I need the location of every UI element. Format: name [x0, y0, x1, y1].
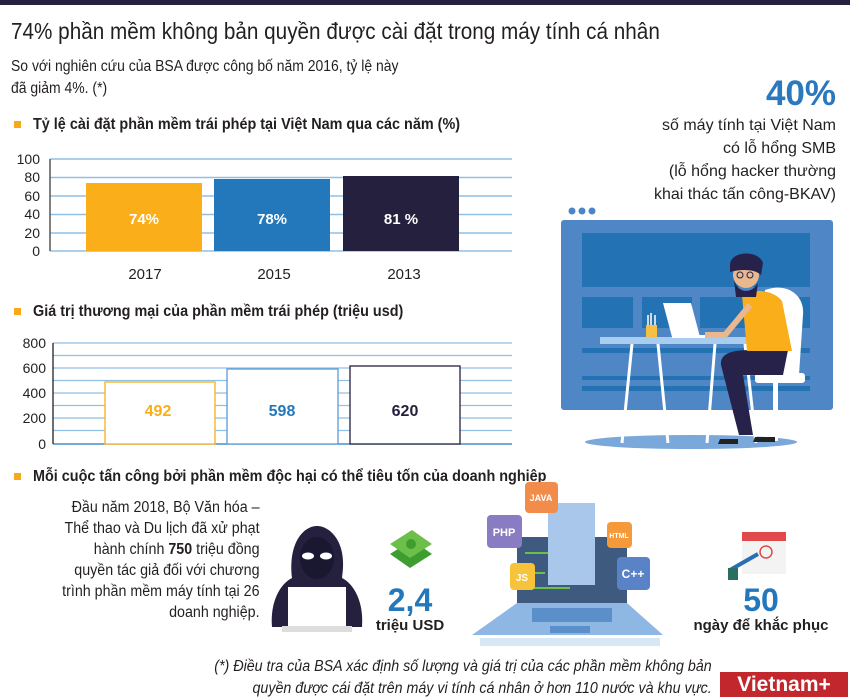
callout: 40% SMB: (lỗ hổng hacker thường	[669, 163, 836, 180]
bar chart: install rate: 100	[17, 151, 40, 167]
bar chart: commercial value	[22, 335, 512, 452]
heading: chart 2: Giá trị thương mại của phần mềm trái phép (triệu usd)	[33, 303, 403, 320]
callout: 40% SMB: số máy tính tại Việt Nam	[662, 117, 836, 134]
bar chart: install rate: 60	[24, 188, 40, 204]
bar chart: install rate: 74%	[129, 211, 159, 228]
logo: Vietnam+	[720, 672, 848, 697]
illustration: laptop with languages: JS	[516, 573, 528, 584]
bar chart: install rate: 20	[24, 225, 40, 241]
icon: money	[390, 530, 432, 568]
text block: fine: quyền tác giả đối với chương	[75, 562, 260, 579]
stat: 2,4 million USD: triệu USD	[376, 617, 444, 634]
bar chart: commercial value: 0	[38, 436, 46, 452]
text block: fine: hành chính 750 triệu đồng	[94, 541, 260, 558]
stat: 2,4 million USD	[376, 582, 444, 634]
stat: 2,4 million USD: 2,4	[388, 582, 432, 618]
callout: 40% SMB: 40%	[766, 74, 836, 113]
logo: Vietnam+: Vietnam+	[737, 673, 831, 696]
bar chart: commercial value: 492	[145, 403, 171, 420]
icon: hacker	[272, 526, 362, 632]
chair	[759, 288, 803, 375]
bar chart: install rate: 81 %	[384, 211, 418, 228]
top bar	[0, 0, 850, 5]
shirt	[742, 291, 792, 351]
head	[733, 262, 759, 288]
bar chart: install rate: 2017	[128, 266, 162, 283]
bar chart: commercial value: 200	[23, 410, 46, 426]
bar chart: install rate	[17, 151, 512, 283]
callout: 40% SMB: có lỗ hổng SMB	[723, 140, 836, 157]
bar chart: commercial value: 800	[23, 335, 46, 351]
bar chart: install rate: 80	[24, 169, 40, 185]
footnote: quyền được cái đặt trên máy vi tính cá nhân ở hơn 110 nước và khu vực.	[253, 680, 712, 697]
heading: attack cost: Mỗi cuộc tấn công bởi phần mềm độc hại có thể tiêu tốn của doanh nghiệp	[33, 468, 546, 485]
text block: fine: trình phần mềm máy tính tại 26	[63, 583, 260, 600]
illustration: man at desk	[561, 208, 833, 449]
text block: fine: Thể thao và Du lịch đã xử phạt	[65, 520, 260, 537]
callout: 40% SMB: khai thác tấn công-BKAV)	[654, 186, 836, 203]
stat: 50 days: ngày để khắc phục	[693, 617, 829, 634]
stat: 50 days: 50	[743, 582, 779, 618]
subtitle: đã giảm 4%. (*)	[11, 80, 107, 97]
bar chart: commercial value: 598	[269, 403, 295, 420]
footnote	[214, 658, 712, 697]
footnote: (*) Điều tra của BSA xác định số lượng và giá trị của các phần mềm không bản	[215, 658, 712, 675]
illustration: laptop with languages: JAVA	[530, 493, 553, 503]
arms	[705, 305, 750, 335]
bar chart: commercial value: 620	[392, 403, 418, 420]
stat: 50 days	[693, 582, 829, 634]
heading: chart 1: Tỷ lệ cài đặt phần mềm trái phép tại Việt Nam qua các năm (%)	[33, 116, 460, 133]
text block: fine: doanh nghiệp.	[170, 604, 260, 621]
bar chart: install rate: 78%	[257, 211, 287, 228]
bar chart: install rate: 2015	[257, 266, 291, 283]
bar chart: install rate: 0	[32, 243, 40, 259]
desk	[600, 337, 768, 344]
subtitle	[11, 58, 399, 97]
subtitle: So với nghiên cứu của BSA được công bố năm 2016, tỷ lệ này	[11, 58, 399, 75]
illustration: laptop with languages: PHP	[493, 527, 515, 539]
bar chart: install rate: 2013	[387, 266, 421, 283]
callout: 40% SMB	[654, 74, 836, 203]
text block: fine: Đầu năm 2018, Bộ Văn hóa –	[72, 499, 260, 516]
icon: calendar	[728, 532, 786, 580]
bar chart: install rate: 40	[24, 206, 40, 222]
text block: fine	[62, 499, 260, 621]
legs	[721, 350, 788, 435]
illustration: laptop with languages	[472, 482, 663, 646]
bar chart: commercial value: 400	[23, 385, 46, 401]
bar chart: commercial value: 600	[23, 360, 46, 376]
laptop	[663, 303, 700, 337]
illustration: laptop with languages: HTML	[609, 533, 629, 540]
illustration: laptop with languages: C++	[622, 567, 644, 581]
title: 74% phần mềm không bản quyền được cài đặt trong máy tính cá nhân	[11, 18, 660, 44]
